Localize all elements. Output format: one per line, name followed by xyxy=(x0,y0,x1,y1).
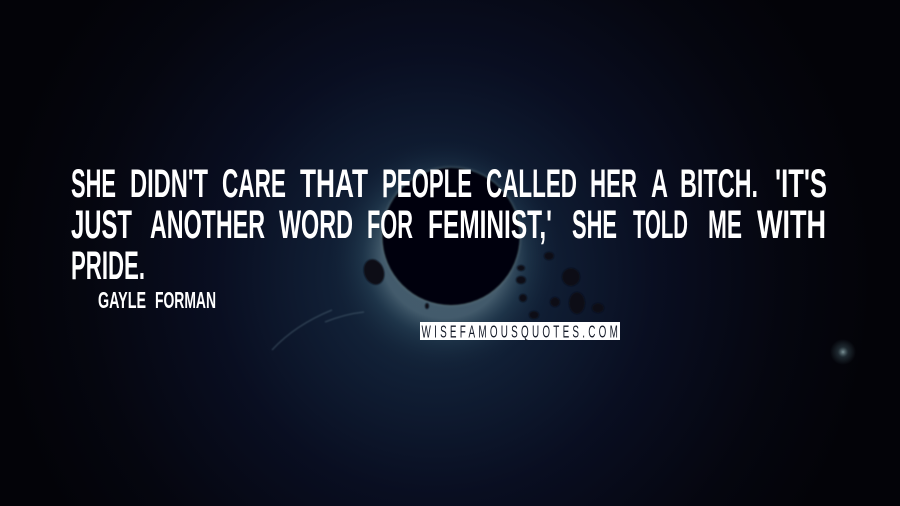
quote text: CALLED xyxy=(486,162,577,206)
quote text: THAT xyxy=(300,162,368,206)
asteroids xyxy=(360,252,604,319)
quote text: PRIDE. xyxy=(71,244,145,288)
quote text: ME xyxy=(708,203,742,247)
quote text: BITCH. xyxy=(680,162,758,206)
quote text: JUST xyxy=(71,203,132,247)
quote text: CARE xyxy=(222,162,286,206)
quote text: WITH xyxy=(757,203,826,247)
light streaks xyxy=(272,310,364,350)
quote text: PEOPLE xyxy=(382,162,472,206)
quote text: SHE xyxy=(71,162,116,206)
quote text: DIDN'T xyxy=(130,162,208,206)
watermark badge: WISEFAMOUSQUOTES.COM xyxy=(422,323,618,342)
quote text: SHE xyxy=(572,203,617,247)
quote text: TOLD xyxy=(633,203,688,247)
author name: GAYLE xyxy=(98,287,146,313)
author name xyxy=(98,287,216,313)
quote text: A xyxy=(651,162,668,206)
quote text: FEMINIST,' xyxy=(428,203,552,247)
author name: FORMAN xyxy=(155,287,216,313)
quote text: 'IT'S xyxy=(775,162,827,206)
quote text xyxy=(71,162,827,288)
quote text: WORD xyxy=(279,203,353,247)
eclipse: black disc with glowing rim xyxy=(330,140,560,370)
quote text: ANOTHER xyxy=(150,203,265,247)
quote text: FOR xyxy=(367,203,413,247)
distant star xyxy=(830,339,856,365)
quote text: HER xyxy=(590,162,637,206)
